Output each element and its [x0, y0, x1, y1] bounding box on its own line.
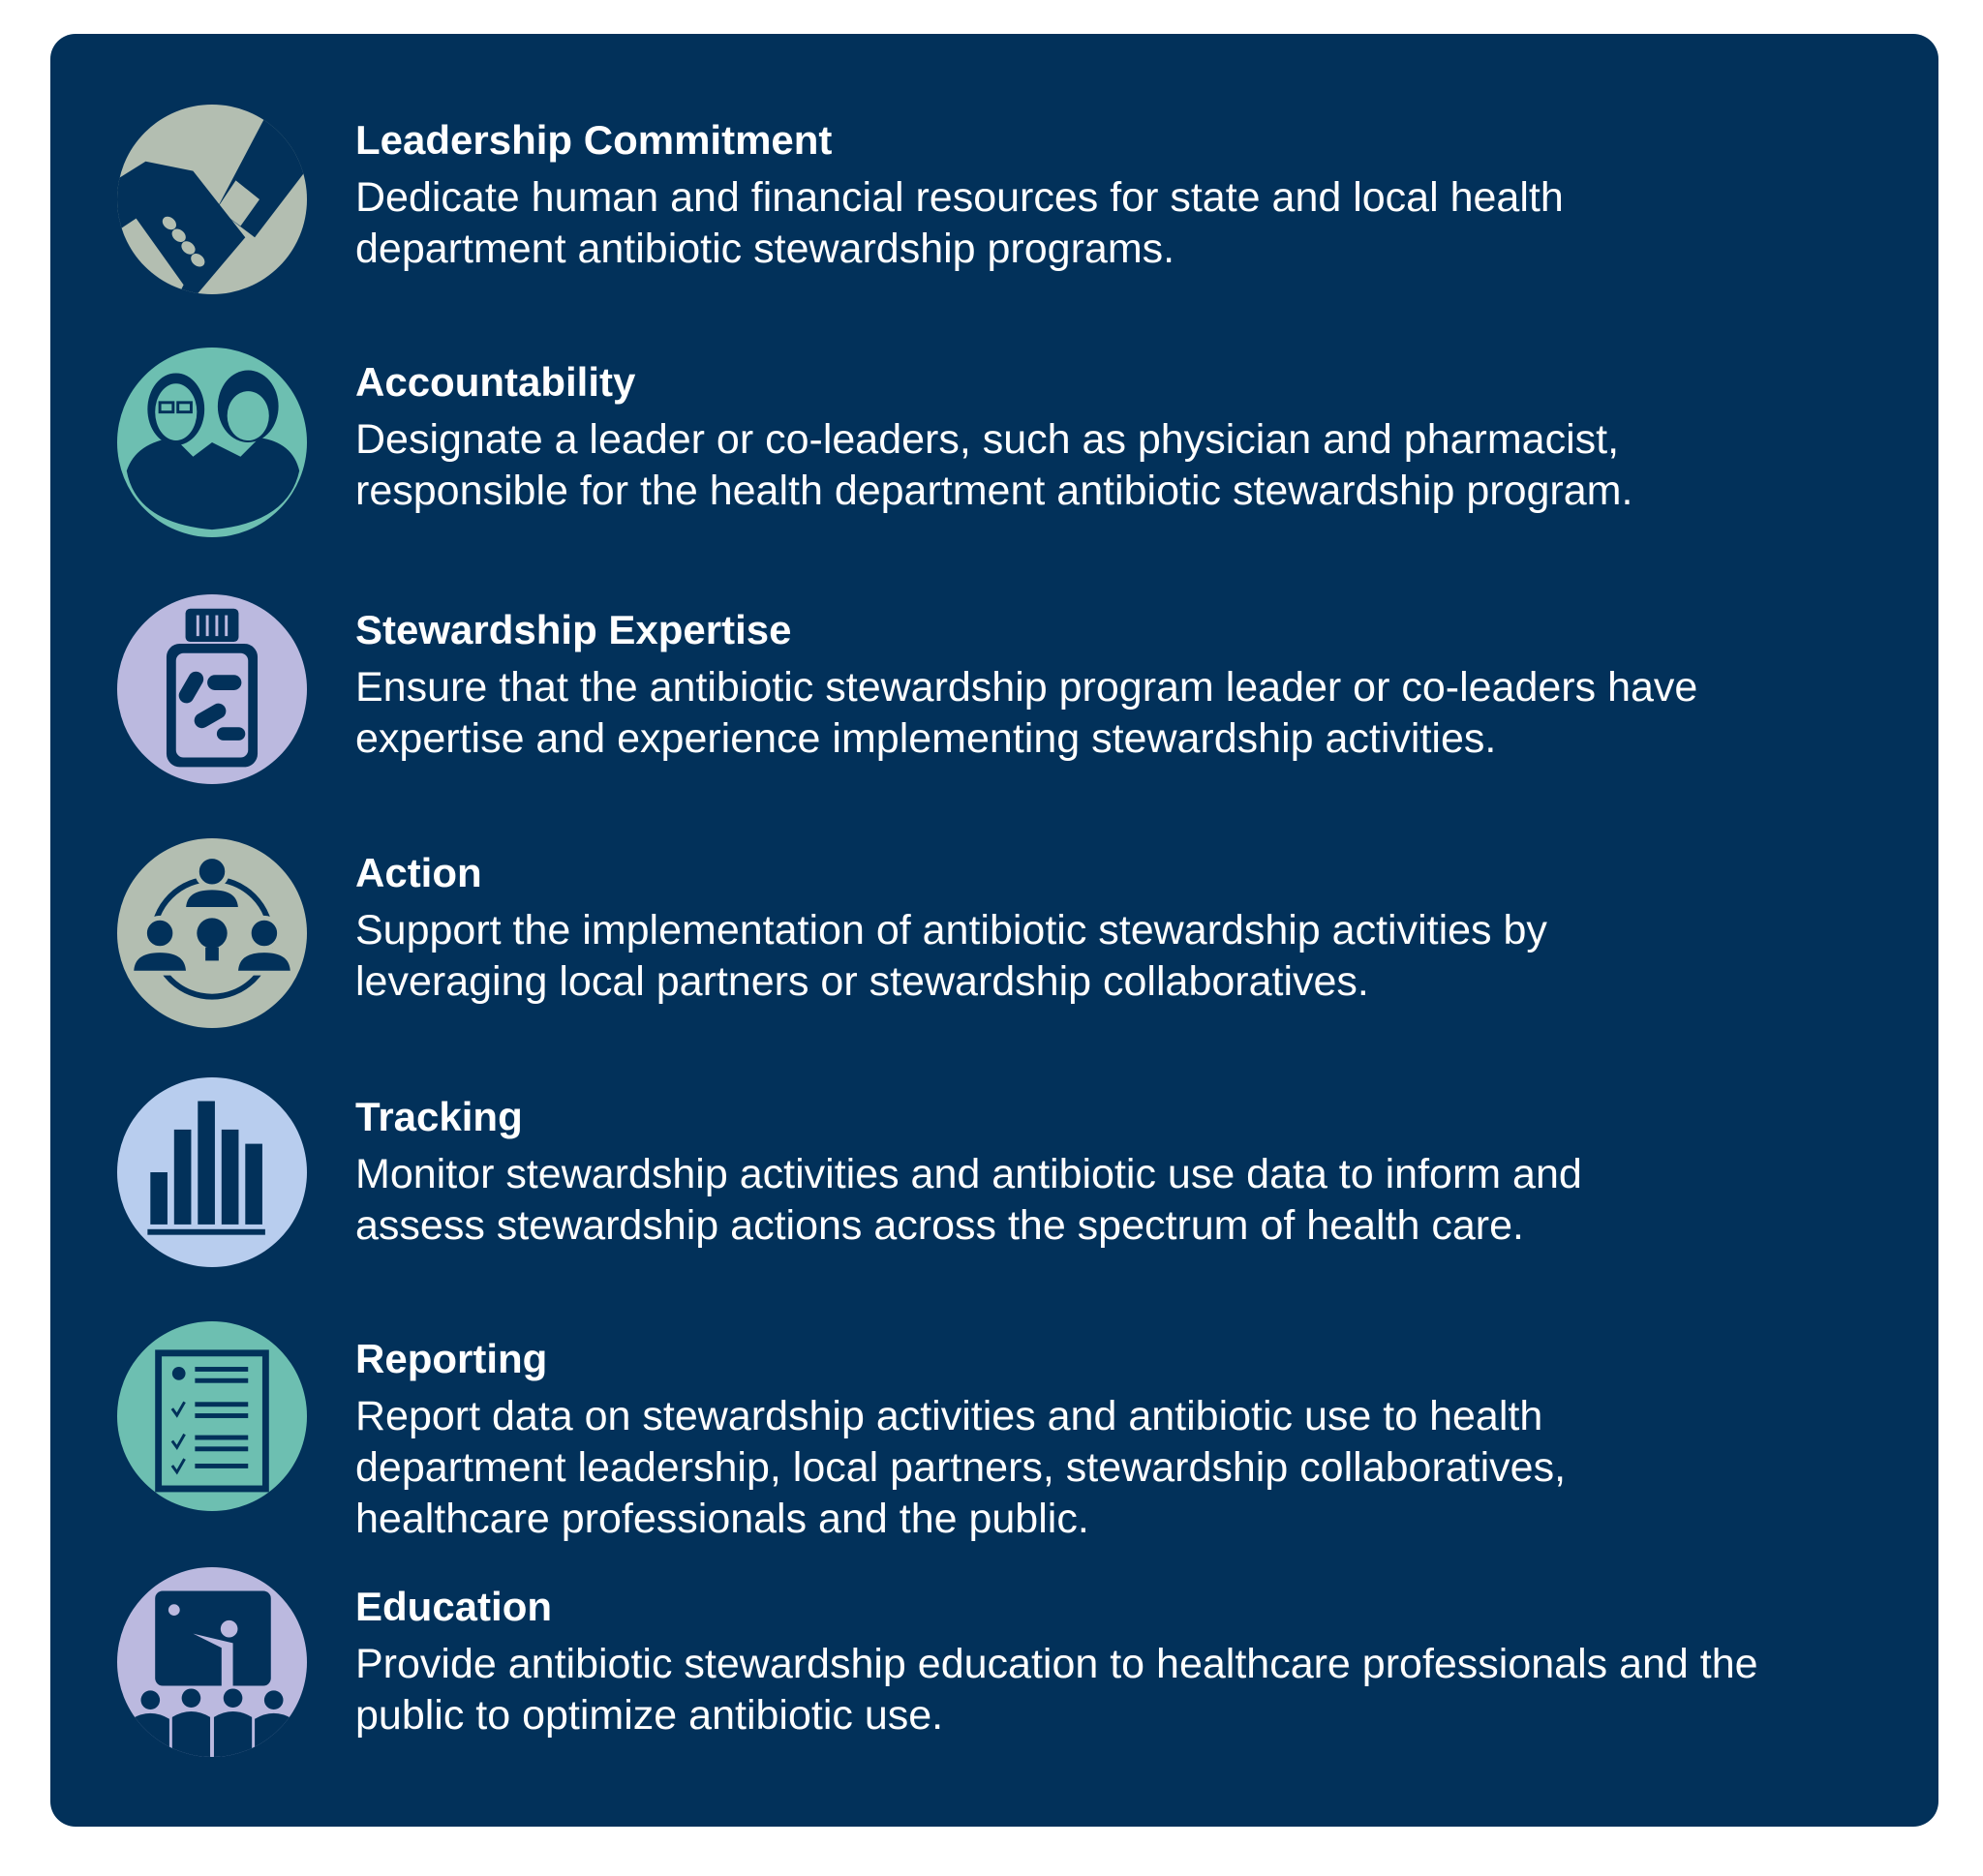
text: leadership commitment: department antibiotic stewardship programs. — [355, 226, 1175, 272]
icon: handshake — [117, 105, 307, 294]
text: leadership commitment: Dedicate human and financial resources for state and local health — [355, 174, 1564, 221]
text: stewardship expertise: Ensure that the antibiotic stewardship program leader or co-leaders have — [355, 664, 1697, 711]
text: accountability: responsible for the health department antibiotic stewardship program. — [355, 468, 1632, 514]
text: stewardship expertise: expertise and experience implementing stewardship activities. — [355, 715, 1496, 762]
text: stewardship expertise — [355, 607, 1697, 762]
text: leadership commitment — [355, 117, 1564, 272]
text: accountability: Designate a leader or co-leaders, such as physician and pharmacist, — [355, 416, 1619, 463]
icon: teacher with audience — [117, 1567, 307, 1757]
text: education — [355, 1584, 1758, 1739]
text: reporting: department leadership, local partners, stewardship collaboratives, — [355, 1444, 1566, 1491]
text: education: Provide antibiotic stewardship education to healthcare professionals and the — [355, 1641, 1758, 1687]
icon: pill bottle — [117, 594, 307, 784]
icon: bar chart — [117, 1077, 307, 1267]
text: action — [355, 850, 1547, 1005]
icon: two people — [117, 348, 307, 537]
text: tracking: assess stewardship actions across the spectrum of health care. — [355, 1202, 1524, 1249]
text: action: leveraging local partners or stewardship collaboratives. — [355, 958, 1369, 1005]
text: leadership commitment: Leadership Commitment — [355, 117, 832, 163]
icon: group with lightbulb — [117, 838, 307, 1028]
text: reporting: Report data on stewardship activities and antibiotic use to health — [355, 1393, 1542, 1439]
text: tracking: Tracking — [355, 1094, 523, 1139]
text: accountability: Accountability — [355, 359, 635, 405]
text: tracking — [355, 1094, 1582, 1249]
text: education: Education — [355, 1584, 552, 1629]
text: stewardship expertise: Stewardship Expertise — [355, 607, 792, 652]
text: tracking: Monitor stewardship activities and antibiotic use data to inform and — [355, 1151, 1582, 1197]
text: action: Support the implementation of antibiotic stewardship activities by — [355, 907, 1547, 953]
text: accountability — [355, 359, 1632, 514]
text: action: Action — [355, 850, 482, 895]
text: reporting: Reporting — [355, 1336, 547, 1381]
icon: checklist report — [117, 1321, 307, 1511]
text: education: public to optimize antibiotic use. — [355, 1692, 943, 1739]
text: reporting: healthcare professionals and the public. — [355, 1496, 1089, 1542]
text: reporting — [355, 1336, 1566, 1542]
